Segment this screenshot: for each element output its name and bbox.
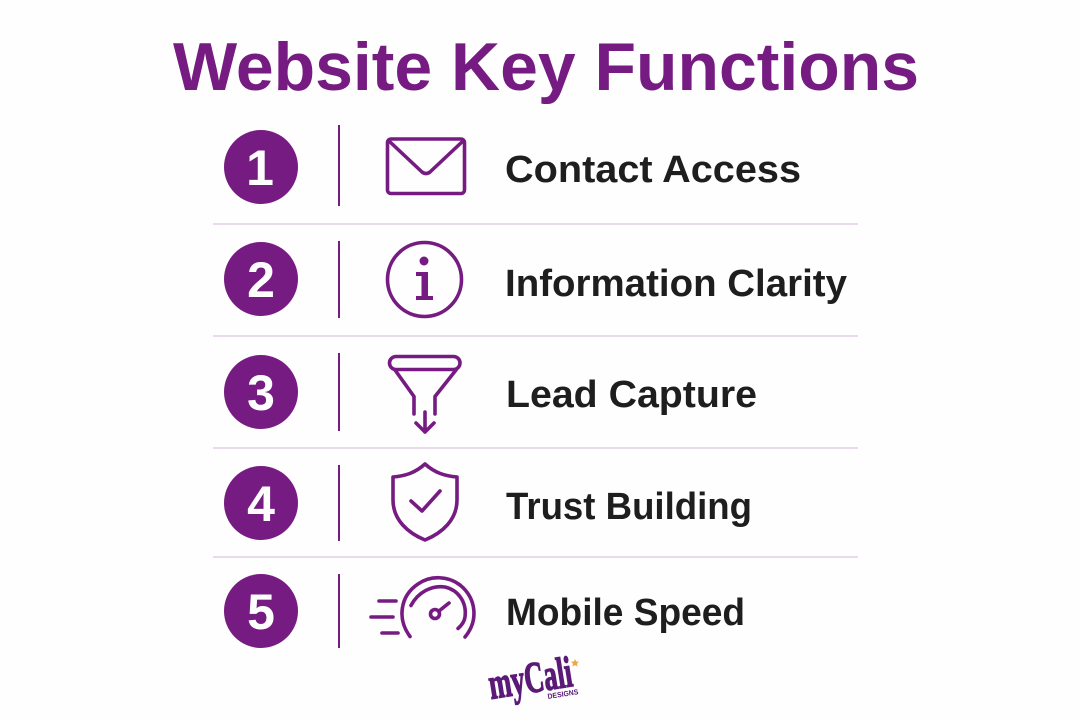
number badge 5: 5	[247, 584, 275, 640]
logo: myCali Designs: DESIGNS	[547, 687, 579, 701]
logo: myCali Designs: myCali	[485, 647, 576, 709]
icon: envelope	[388, 139, 464, 194]
row 1: contact access	[224, 130, 801, 204]
icon: information	[388, 242, 462, 316]
icon: shield	[393, 464, 457, 540]
icon: funnel	[390, 356, 460, 432]
label: information clarity: Information Clarity	[505, 263, 847, 305]
label: lead capture: Lead Capture	[506, 374, 757, 416]
number badge 1: 1	[246, 140, 274, 196]
number badge 3: 3	[247, 365, 275, 421]
number badge 5	[224, 574, 298, 648]
row 2: information clarity	[224, 242, 847, 316]
row 5: mobile speed	[224, 574, 745, 648]
label: trust building: Trust Building	[506, 486, 752, 528]
title: Website Key Functions	[173, 29, 919, 105]
row 4: trust building	[224, 464, 752, 540]
label: contact access: Contact Access	[505, 149, 801, 191]
number badge 1	[224, 130, 298, 204]
logo: myCali Designs	[485, 647, 579, 709]
number badge 4	[224, 466, 298, 540]
row 3: lead capture	[224, 355, 757, 432]
icon: speedometer	[371, 578, 474, 637]
number badge 2	[224, 242, 298, 316]
number badge 3	[224, 355, 298, 429]
number badge 4: 4	[247, 476, 275, 532]
label: mobile speed: Mobile Speed	[506, 592, 745, 634]
number badge 2: 2	[247, 252, 275, 308]
